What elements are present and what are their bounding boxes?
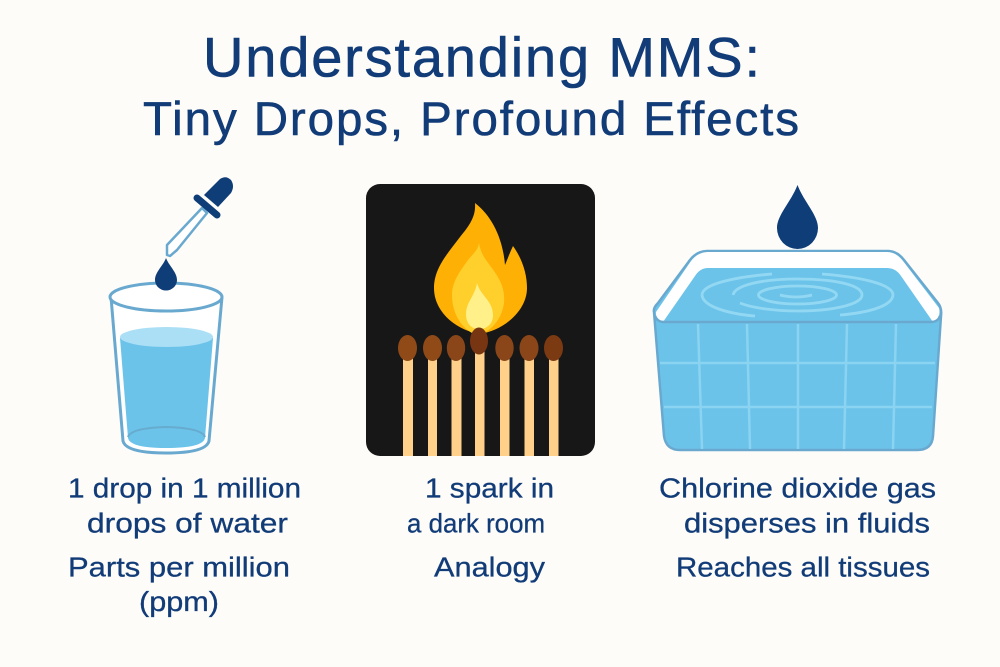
text: drop caption: 1 drop in 1 million: [68, 472, 301, 504]
text: gas caption: Chlorine dioxide gas: [659, 472, 936, 504]
tile grid: [660, 324, 935, 449]
text: drop caption: Parts per million: [68, 552, 290, 582]
text: drop caption: drops of water: [87, 508, 288, 538]
text: spark caption: 1 spark in: [425, 472, 554, 504]
title: Tiny Drops, Profound Effects: [143, 93, 799, 146]
icon: matches: [398, 328, 563, 456]
text: gas caption: disperses in fluids: [684, 508, 930, 538]
icon: large drop: [777, 185, 818, 249]
text: spark caption: a dark room: [407, 508, 545, 538]
panel: spark in dark room: [366, 184, 595, 582]
icon: flame: [434, 203, 527, 334]
icon: container: [654, 251, 941, 450]
text: gas caption: [659, 472, 936, 582]
ripples: [702, 274, 893, 316]
icon: glass of water: [110, 283, 222, 453]
title: [143, 26, 799, 146]
panel: drop in water: [68, 177, 301, 617]
panel: gas disperses: [654, 185, 941, 582]
icon: dropper: [167, 177, 233, 256]
icon: falling drop: [155, 258, 177, 290]
text: drop caption: [68, 472, 301, 617]
text: gas caption: Reaches all tissues: [676, 552, 930, 582]
text: drop caption: (ppm): [139, 586, 219, 617]
title: Understanding MMS:: [203, 26, 760, 88]
dark background: [366, 184, 595, 456]
text: spark caption: Analogy: [434, 552, 545, 582]
text: spark caption: [407, 472, 554, 582]
